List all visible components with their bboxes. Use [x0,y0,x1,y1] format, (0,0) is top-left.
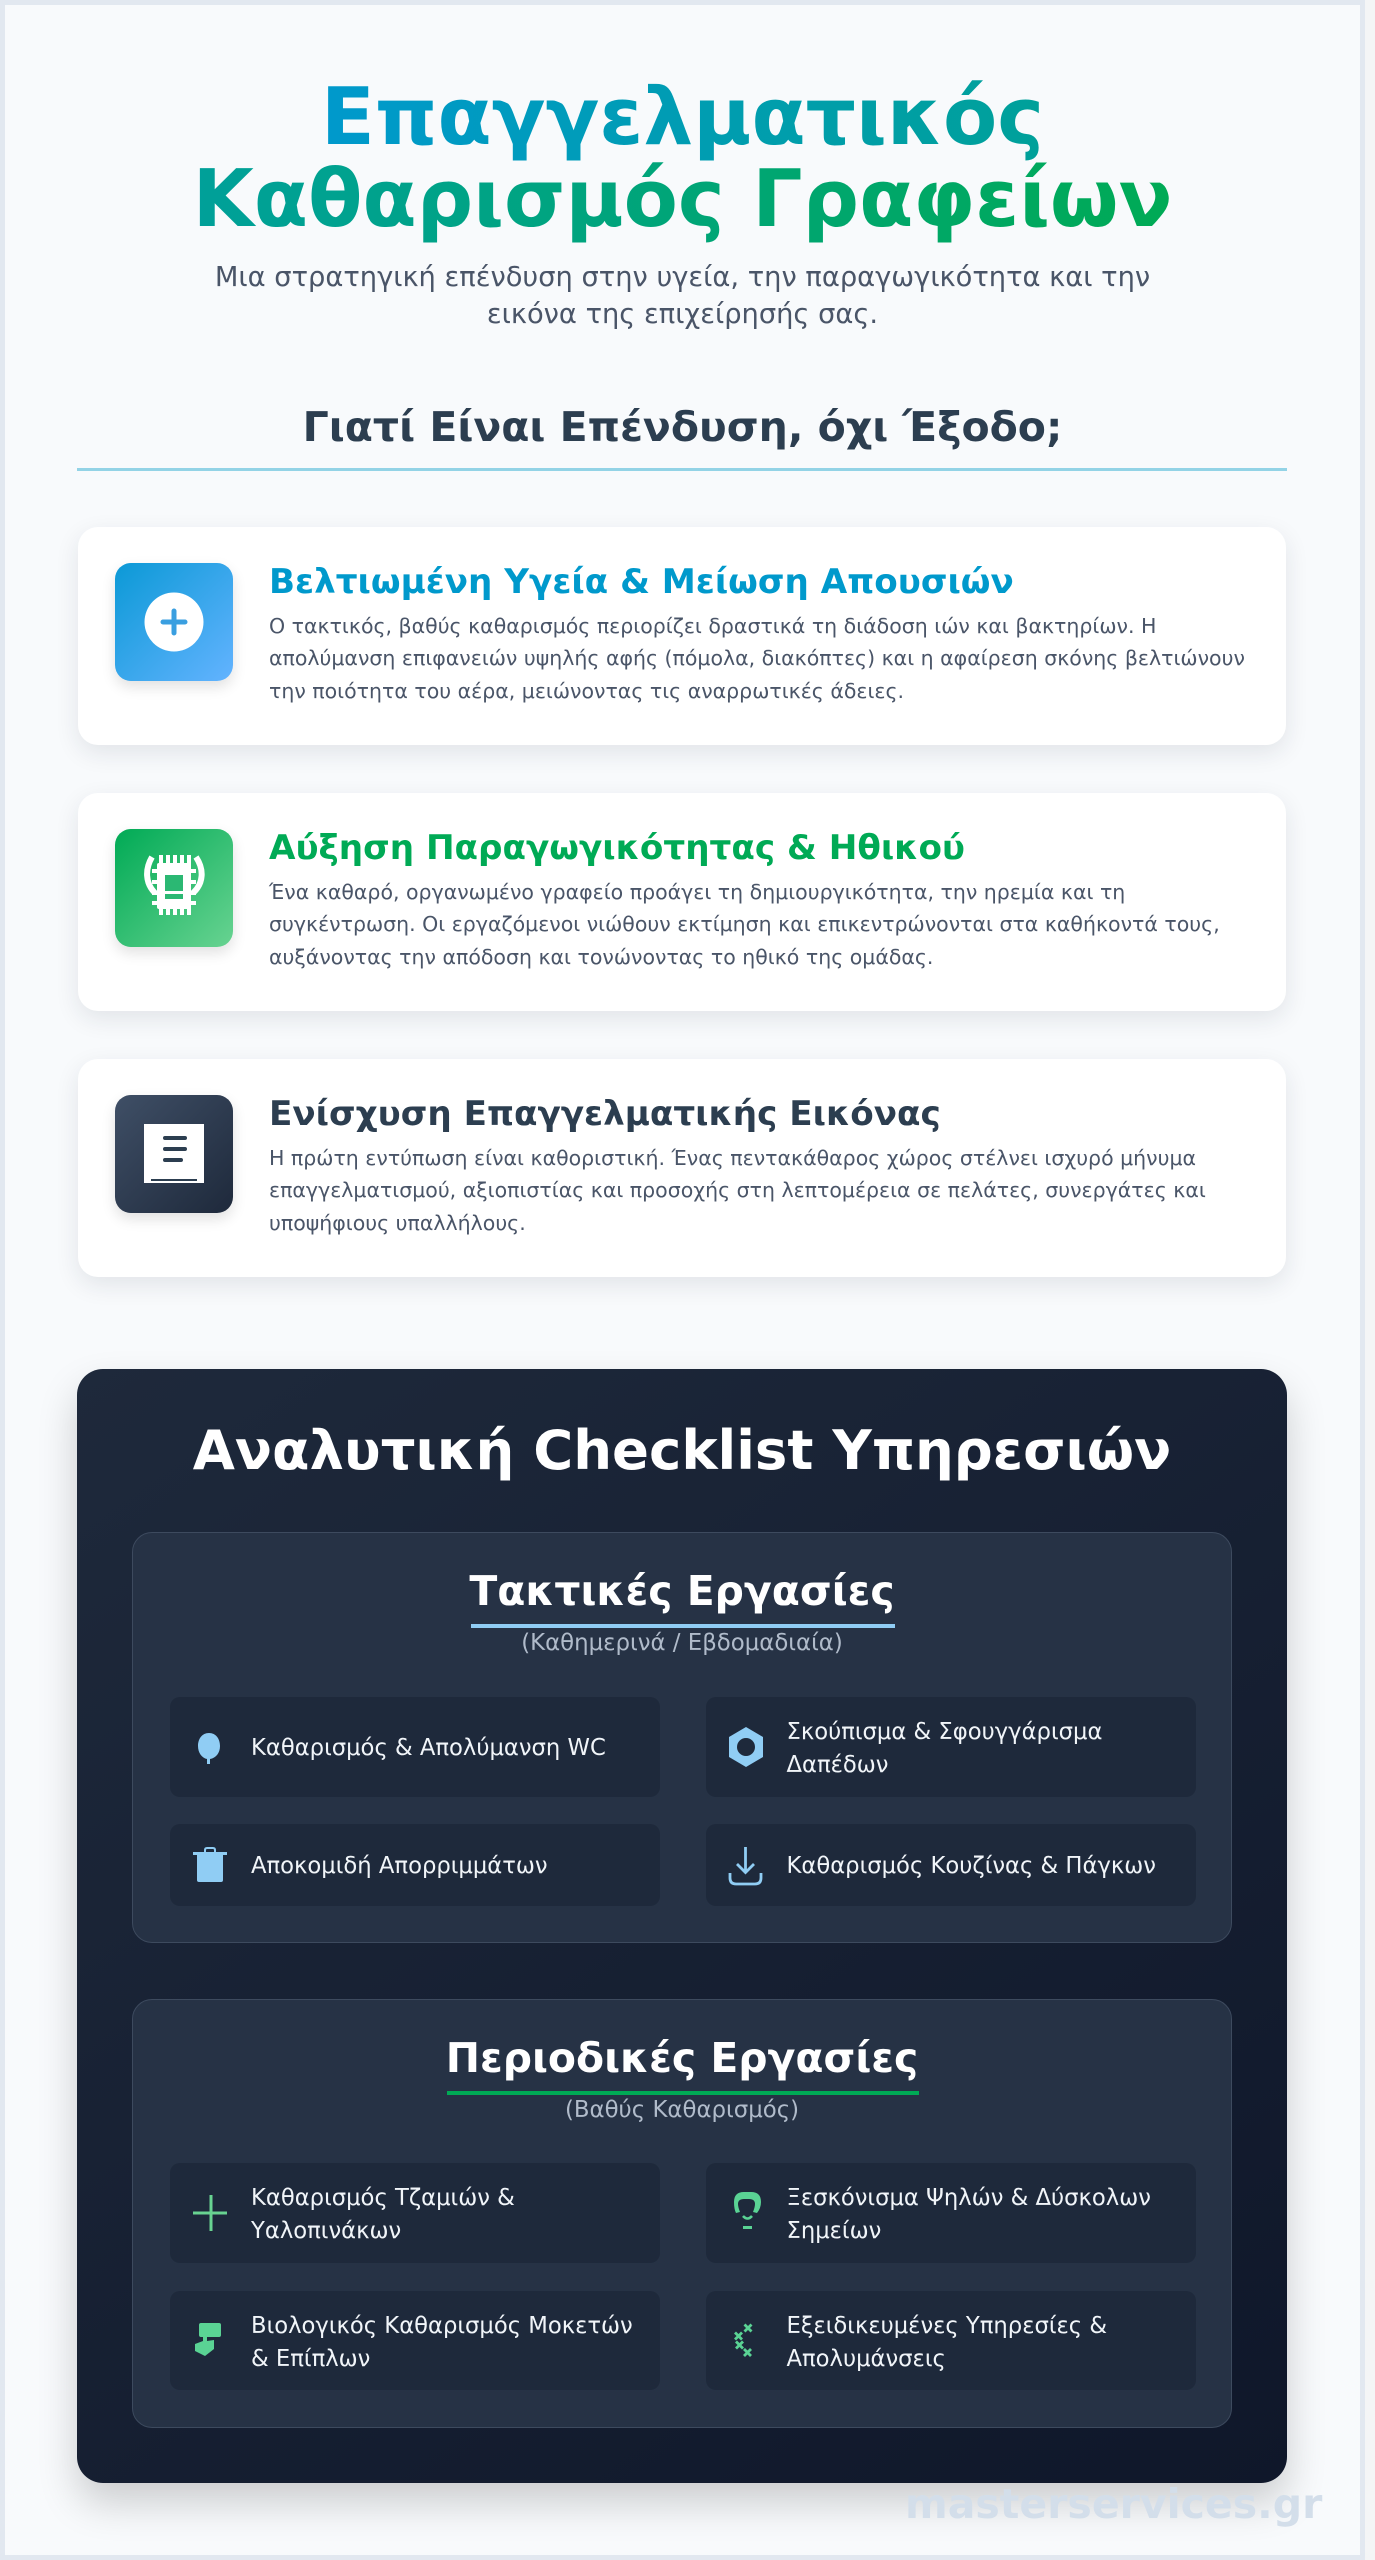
heading: routine: Τακτικές Εργασίες [469,1567,895,1615]
label: special services [786,2313,1107,2372]
heading: checklist: Αναλυτική Checklist Υπηρεσιών [193,1418,1171,1482]
icon: drop [198,1733,220,1764]
icon: download tray [728,1847,762,1886]
text: image: Η πρώτη εντύπωση είναι καθοριστική. Ένας πεντακάθαρος χώρος στέλνει ισχυρό μήνυμα [269,1146,1196,1170]
icon: document [115,1095,233,1213]
item: dusting [706,2163,1196,2263]
section heading: why investment: Γιατί Είναι Επένδυση, όχι Έξοδο; [303,403,1062,451]
label: special services: Εξειδικευμένες Υπηρεσίες & [786,2313,1107,2339]
text: productivity [268,880,1220,969]
item: WC [170,1697,660,1797]
heading underline: periodic [447,2091,919,2095]
text: image [269,1146,1206,1235]
item: floors [706,1697,1196,1797]
heading: image: Ενίσχυση Επαγγελματικής Εικόνας [269,1094,941,1134]
subtitle: Μια στρατηγική επένδυση στην υγεία, την παραγωγικότητα και την [215,262,1150,293]
icon: chip [115,829,233,947]
text: health [269,614,1245,703]
item: waste [170,1824,660,1906]
panel: image benefit card [78,1059,1286,1277]
label: carpets: & Επίπλων [251,2346,370,2372]
heading: productivity: Αύξηση Παραγωγικότητας & Ηθικού [269,828,965,868]
label: floors: Δαπέδων [786,1752,888,1778]
label: carpets: Βιολογικός Καθαρισμός Μοκετών [251,2313,633,2339]
panel: productivity benefit card [78,793,1286,1011]
title: Επαγγελματικός [321,71,1044,163]
label: dusting [786,2185,1151,2244]
text: health: Ο τακτικός, βαθύς καθαρισμός περιορίζει δραστικά τη διάδοση ιών και βακτηρίων. Η [269,614,1156,638]
heading: periodic: Περιοδικές Εργασίες [446,2034,918,2082]
label: waste: Αποκομιδή Απορριμμάτων [251,1853,548,1879]
item: kitchen [706,1824,1196,1906]
text: health: απολύμανση επιφανειών υψηλής αφής (πόμολα, διακόπτες) και η αφαίρεση σκόνης βελτιώνουν [269,646,1245,670]
heading underline: routine [471,1624,895,1628]
panel: services checklist [77,1369,1287,2483]
caption: periodic: (Βαθύς Καθαρισμός) [565,2097,799,2123]
heading: health: Βελτιωμένη Υγεία & Μείωση Απουσιών [269,562,1014,602]
label: carpets [251,2313,633,2372]
subtitle [215,262,1150,330]
item: windows [170,2163,660,2263]
icon: medical plus [115,563,233,681]
text: health: την ποιότητα του αέρα, μειώνοντας τις αναρρωτικές άδειες. [269,679,904,703]
title [193,71,1172,245]
label: floors [786,1719,1102,1778]
panel: periodic tasks [132,1999,1232,2428]
panel: health benefit card [78,527,1286,745]
label: windows: Καθαρισμός Τζαμιών & [251,2185,515,2211]
subtitle: εικόνα της επιχείρησής σας. [487,299,878,330]
heading rule [77,468,1287,471]
icon: hexagon nut [729,1727,763,1767]
label: dusting: Ξεσκόνισμα Ψηλών & Δύσκολων [786,2185,1151,2211]
text: productivity: συγκέντρωση. Οι εργαζόμενοι νιώθουν εκτίμηση και επικεντρώνονται στα καθήκοντά τους, [269,912,1220,936]
icon: trash bin [193,1847,227,1882]
label: windows: Υαλοπινάκων [251,2218,401,2244]
icon: crosses [734,2324,752,2357]
label: dusting: Σημείων [786,2218,881,2244]
label: kitchen: Καθαρισμός Κουζίνας & Πάγκων [786,1853,1156,1879]
label: WC: Καθαρισμός & Απολύμανση WC [251,1735,606,1761]
title: Καθαρισμός Γραφείων [193,153,1172,245]
panel: routine tasks [132,1532,1232,1943]
label: floors: Σκούπισμα & Σφουγγάρισμα [786,1719,1102,1745]
item: special services [706,2291,1196,2390]
caption: routine: (Καθημερινά / Εβδομαδιαία) [521,1630,843,1656]
label: special services: Απολυμάνσεις [786,2346,946,2372]
label: windows [251,2185,515,2244]
text: image: επαγγελματισμού, αξιοπιστίας και προσοχής στη λεπτομέρεια σε πελάτες, συνεργάτες και [269,1178,1206,1202]
watermark behind panel shadow: masterservices.gr [905,2480,1322,2528]
text: productivity: Ένα καθαρό, οργανωμένο γραφείο προάγει τη δημιουργικότητα, την ηρεμία και τη [269,880,1125,904]
icon: brush [195,2323,221,2356]
item: carpets [170,2291,660,2390]
text: productivity: αυξάνοντας την απόδοση και τονώνοντας το ηθικό της ομάδας. [269,945,933,969]
icon: duster [734,2192,761,2229]
icon: plus [193,2195,227,2231]
text: image: υποψήφιους υπαλλήλους. [269,1211,526,1235]
